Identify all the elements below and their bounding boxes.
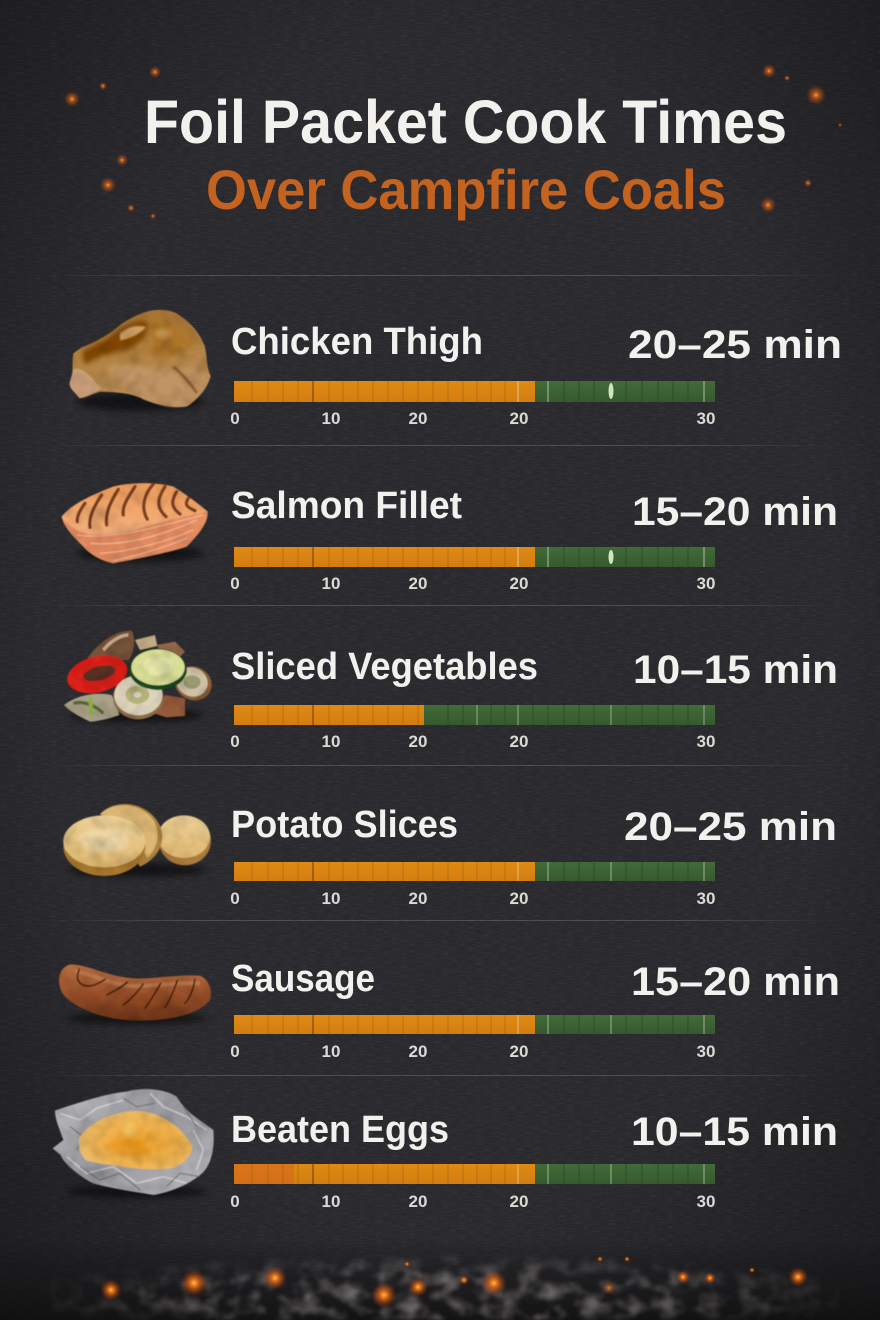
label: chicken thigh: Chicken Thigh <box>231 321 483 363</box>
time: 10–15 min: 10–15 min <box>633 648 838 692</box>
row: sausage <box>59 958 840 1061</box>
progress bar <box>234 547 715 567</box>
axis labels: 20 <box>409 732 427 751</box>
axis labels: 20 <box>409 574 427 593</box>
axis labels: 0 <box>230 1192 240 1211</box>
time: 15–20 min: 15–20 min <box>631 960 840 1004</box>
time: 10–15 min: 10–15 min <box>631 1110 838 1154</box>
axis labels <box>230 732 715 751</box>
axis labels: 30 <box>697 409 715 428</box>
label: beaten eggs: Beaten Eggs <box>231 1109 449 1151</box>
axis labels: 0 <box>230 1042 240 1061</box>
time: 20–25 min: 20–25 min <box>624 805 837 849</box>
axis labels: 30 <box>697 1192 715 1211</box>
row: beaten eggs <box>53 1089 838 1211</box>
axis labels: 0 <box>230 409 240 428</box>
axis labels: 20 <box>409 889 427 908</box>
axis labels: 30 <box>697 889 715 908</box>
row: salmon fillet <box>62 483 838 593</box>
time: 15–20 min: 15–20 min <box>632 490 838 534</box>
row: sliced vegetables <box>63 631 838 751</box>
axis labels <box>230 1192 715 1211</box>
axis labels: 10 <box>322 889 340 908</box>
axis labels: 20 <box>510 1042 528 1061</box>
label: sliced vegetables: Sliced Vegetables <box>231 646 538 688</box>
axis labels: 10 <box>322 732 340 751</box>
time: 20–25 min: 20–25 min <box>628 323 842 367</box>
axis labels: 20 <box>510 1192 528 1211</box>
subtitle: Over Campfire Coals <box>206 158 726 221</box>
row dividers <box>40 275 840 1076</box>
icon: salmon fillet <box>62 483 208 563</box>
axis labels: 20 <box>510 889 528 908</box>
progress bar <box>234 381 715 402</box>
axis labels: 20 <box>409 409 427 428</box>
axis labels: 30 <box>697 574 715 593</box>
axis labels <box>230 1042 715 1061</box>
axis labels: 30 <box>697 1042 715 1061</box>
label: potato slices: Potato Slices <box>231 804 458 846</box>
axis labels: 20 <box>510 574 528 593</box>
icon: potato slices <box>63 804 211 877</box>
axis labels: 0 <box>230 889 240 908</box>
axis labels: 20 <box>409 1042 427 1061</box>
progress bar <box>234 1164 715 1184</box>
axis labels: 0 <box>230 732 240 751</box>
icon: sliced vegetables <box>63 631 217 722</box>
floating embers around title <box>64 64 842 219</box>
axis labels: 0 <box>230 574 240 593</box>
axis labels: 10 <box>322 409 340 428</box>
axis labels: 20 <box>409 1192 427 1211</box>
label: sausage: Sausage <box>231 958 375 1000</box>
progress bar <box>234 705 715 725</box>
title: Foil Packet Cook Times <box>144 88 787 156</box>
axis labels: 20 <box>510 409 528 428</box>
axis labels: 10 <box>322 1042 340 1061</box>
axis labels: 10 <box>322 1192 340 1211</box>
axis labels <box>230 409 715 428</box>
axis labels: 30 <box>697 732 715 751</box>
axis labels: 10 <box>322 574 340 593</box>
icon: sausage <box>59 964 211 1024</box>
axis labels <box>230 574 715 593</box>
icon: chicken thigh <box>70 310 211 411</box>
progress bar <box>234 1015 715 1034</box>
glowing coals along bottom <box>0 1256 880 1320</box>
icon: beaten eggs in foil <box>53 1089 214 1198</box>
axis labels <box>230 889 715 908</box>
row: potato slices <box>63 804 837 908</box>
progress bar <box>234 862 715 881</box>
label: salmon fillet: Salmon Fillet <box>231 485 462 527</box>
row: chicken thigh <box>70 310 842 428</box>
axis labels: 20 <box>510 732 528 751</box>
